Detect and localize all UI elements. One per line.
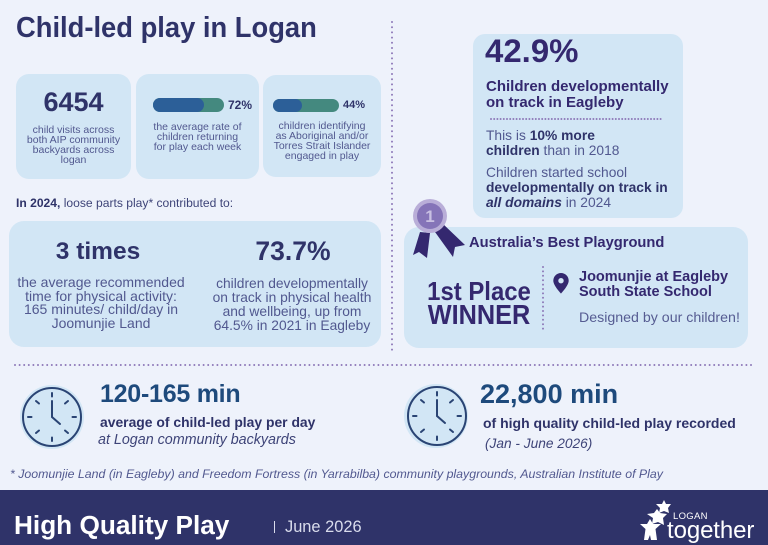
title: Child-led play in Logan [16, 12, 317, 44]
location name: Joomunjie at Eagleby [579, 269, 728, 285]
statistic: 6454: 6454 [43, 87, 104, 117]
panel: Aboriginal and Torres Strait Islander children [263, 75, 381, 177]
divider: vertical dotted [391, 21, 393, 351]
text: high quality play: of high quality child-led play recorded [483, 415, 736, 431]
subheading: loose parts: In 2024, loose parts play* contributed to: [16, 196, 233, 210]
statistic: 120-165 min: 120-165 min [100, 380, 240, 408]
text: child visits description: backyards across [33, 144, 114, 156]
statistic: 3 times: 3 times [56, 238, 140, 265]
text: 10% more [486, 128, 619, 158]
text: 73.7% description: children developmentally [216, 276, 368, 291]
statistic: 44%: 44% [343, 99, 365, 111]
text: identification description [274, 120, 370, 162]
statistic: 73.7%: 73.7% [255, 236, 331, 266]
text: 10% more: This is 10% more [486, 128, 595, 143]
text: all domains [486, 165, 668, 210]
panel: return rate [136, 74, 259, 179]
text: 3 times description: 165 minutes/ child/day in [24, 301, 178, 317]
award text: 1st place winner: 1st Place [427, 276, 531, 306]
heading: on track in Eagleby [486, 78, 669, 111]
heading: on track in Eagleby: Children developmentally [486, 78, 669, 95]
text: 3 times description [17, 274, 185, 331]
text: child visits description [27, 124, 120, 166]
icon: ribbon medal: 1 [425, 207, 435, 226]
text: child visits description: both AIP community [27, 134, 120, 146]
award text: 1st place winner: WINNER [428, 299, 530, 330]
text: 3 times description: Joomunjie Land [52, 315, 150, 331]
logo wordmark small: LOGAN [673, 511, 708, 522]
panel: loose parts outcomes [9, 221, 381, 347]
divider: horizontal dotted [14, 364, 752, 366]
divider: dotted [490, 118, 662, 120]
text: child visits description: logan [61, 154, 86, 166]
text: 73.7% description: on track in physical health [213, 290, 371, 305]
text: 10% more: children than in 2018 [486, 142, 619, 158]
text: 3 times description: time for physical activity: [25, 288, 177, 304]
logo: Logan Together [640, 500, 754, 544]
heading: on track in Eagleby: on track in Eagleby [486, 94, 624, 111]
text: return rate description: children returning [157, 131, 238, 143]
location name: South State School [579, 284, 712, 300]
footer title: High Quality Play [14, 510, 229, 540]
statistic: 72%: 72% [228, 98, 252, 112]
logo wordmark large: together [667, 517, 754, 544]
text: identification description: children identifying [279, 120, 365, 132]
text: return rate description [153, 121, 242, 153]
heading: Australia's Best Playground: Australia’s Best Playground [469, 235, 664, 251]
footnote: * Joomunjie Land (in Eagleby) and Freedom Fortress (in Yarrabilba) community playgrounds, Australian Institute of Play [10, 467, 663, 481]
icon: location pin [553, 273, 569, 294]
footer separator [274, 521, 275, 533]
text: 3 times description: the average recommended [17, 274, 185, 290]
stat block: 22,800 min [480, 379, 736, 451]
logo icon: stacked stars [640, 500, 671, 540]
text: 73.7% description: 64.5% in 2021 in Eagleby [214, 318, 370, 333]
footer date: June 2026 [285, 518, 362, 536]
location name [579, 269, 728, 300]
text: child visits description: child visits across [33, 124, 114, 136]
text: date range: (Jan - June 2026) [485, 436, 592, 451]
text: location: at Logan community backyards [98, 432, 296, 448]
panel: child visits [16, 74, 131, 179]
text: return rate description: for play each week [154, 141, 241, 153]
stat block: 120-165 min [98, 380, 316, 448]
text: identification description: as Aboriginal and/or [276, 130, 368, 142]
icon: clock left [20, 385, 84, 449]
icon: clock right [404, 384, 468, 448]
icon: ribbon medal [413, 199, 465, 258]
statistic: 22,800 min: 22,800 min [480, 379, 618, 409]
text: all domains: Children started school [486, 165, 627, 180]
text: identification description: Torres Strait Islander [274, 140, 370, 152]
text: return rate description: the average rate of [153, 121, 242, 133]
award text: 1st place winner [427, 276, 531, 330]
text: designed by our children: Designed by our children! [579, 310, 740, 326]
progress bar: 44% [273, 99, 339, 112]
divider: dotted [542, 266, 544, 330]
text: 73.7% description [213, 276, 371, 333]
text: all domains: all domains in 2024 [486, 195, 611, 210]
progress bar: 72% [153, 98, 224, 112]
text: average per day: average of child-led play per day [100, 414, 315, 430]
text: all domains: developmentally on track in [486, 180, 668, 195]
panel: award [404, 227, 748, 348]
statistic: 42.9%: 42.9% [485, 33, 578, 69]
panel: Eagleby developmental [473, 34, 683, 218]
text: identification description: engaged in play [285, 150, 359, 162]
footer band [0, 490, 768, 545]
text: 73.7% description: and wellbeing, up from [223, 304, 361, 319]
